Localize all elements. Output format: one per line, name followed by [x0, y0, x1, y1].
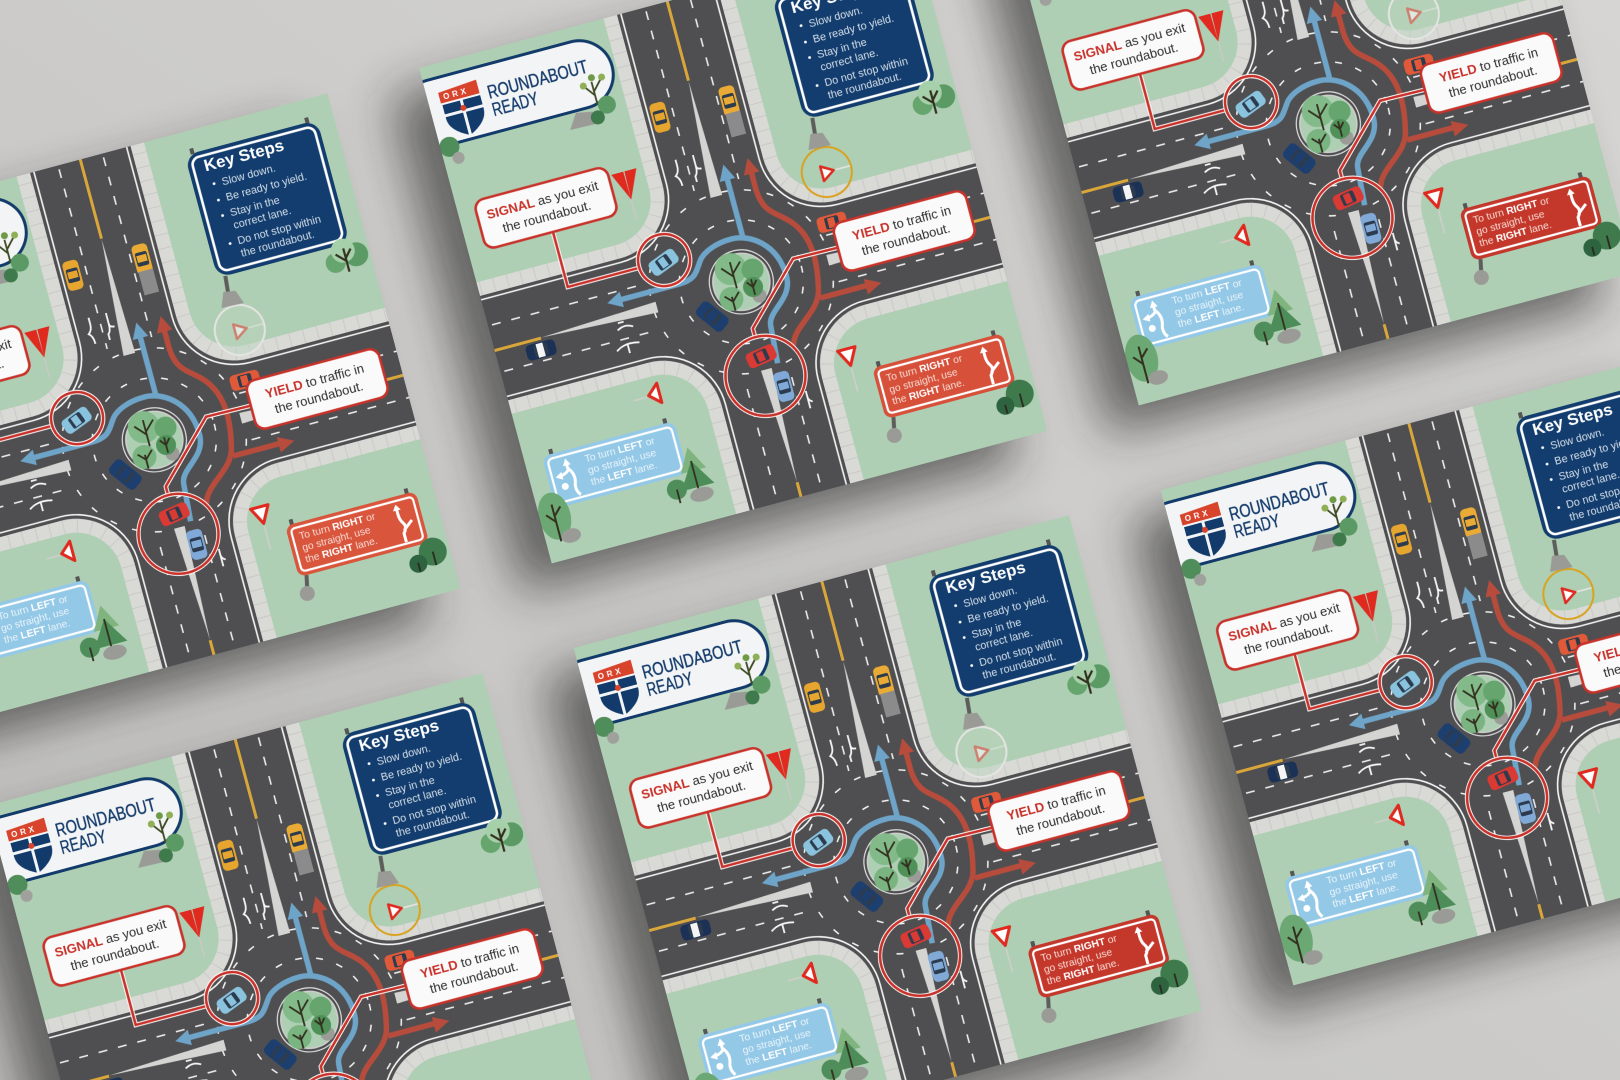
yield callout	[1419, 31, 1564, 115]
right lane sign: the RIGHT lane.	[1478, 220, 1553, 250]
vehicles	[1112, 37, 1555, 244]
key steps sign	[774, 0, 934, 150]
highlight ring around yield sign	[364, 879, 425, 941]
poster card: right lower	[1130, 351, 1620, 998]
key steps sign: Do not stop within	[823, 55, 909, 89]
key steps sign: Do not stop within	[236, 213, 322, 247]
red leader lines and highlight circles	[0, 390, 250, 576]
red leader lines and highlight circles	[708, 742, 1031, 1038]
key steps sign: Be ready to yield.	[380, 751, 463, 784]
yield signs	[1198, 7, 1446, 246]
right lane sign	[1022, 908, 1177, 1025]
trees and rocks	[1173, 492, 1464, 971]
left lane sign	[1127, 258, 1275, 351]
trees and rocks	[1018, 0, 1620, 391]
left lane sign: go straight, use	[1174, 290, 1245, 319]
road network with sidewalks	[0, 667, 621, 1080]
left lane sign: To turn LEFT or	[584, 436, 657, 465]
red leader lines and highlight circles	[551, 232, 838, 418]
left lane sign: To turn LEFT or	[1171, 278, 1244, 307]
yield callout	[1573, 611, 1620, 695]
left lane sign: To turn LEFT or	[1325, 858, 1398, 887]
yield signs	[611, 165, 858, 404]
title sign: ROUNDABOUT	[640, 637, 745, 683]
title sign: READY	[490, 89, 540, 120]
key steps sign	[335, 695, 513, 889]
right lane sign: go straight, use	[301, 525, 372, 554]
poster card: top centre	[389, 0, 1053, 576]
signal callout: SIGNAL as you exit	[1072, 20, 1187, 64]
right lane sign	[1454, 170, 1610, 287]
key steps sign: the roundabout.	[981, 651, 1057, 682]
highlight ring around yield sign	[1388, 0, 1440, 40]
left lane sign: the LEFT lane.	[1331, 882, 1400, 910]
signal callout: the roundabout.	[655, 777, 747, 816]
signal callout: the roundabout.	[1088, 39, 1180, 78]
yield signs	[143, 852, 476, 1080]
title sign: READY	[644, 669, 695, 700]
title sign: ORX	[1184, 508, 1212, 524]
left lane sign	[540, 416, 688, 509]
left lane sign: the LEFT lane.	[590, 460, 659, 488]
key steps sign: Stay in the	[816, 36, 868, 61]
yield callout: the roundabout.	[428, 958, 520, 996]
key steps sign: Do not stop within	[391, 793, 477, 827]
key steps sign: correct lane.	[232, 205, 293, 232]
yield callout: the roundabout.	[1015, 800, 1106, 838]
left lane sign: go straight, use	[741, 1028, 812, 1057]
trees and rocks	[440, 73, 1034, 543]
red leader lines and highlight circles	[1138, 74, 1424, 260]
yield callout: the roundabout.	[1447, 62, 1539, 100]
title sign: ORX	[442, 86, 470, 102]
key steps sign	[921, 537, 1100, 731]
key steps sign: the roundabout.	[240, 229, 316, 260]
key steps sign: the roundabout.	[827, 71, 903, 102]
trees and rocks	[0, 723, 527, 978]
right lane sign: To turn RIGHT or	[885, 353, 964, 384]
central island with trees	[270, 981, 349, 1059]
signal callout	[1215, 588, 1360, 672]
poster card: bottom centre	[543, 509, 1208, 1080]
direction arrows	[735, 713, 1049, 982]
yield callout: YIELD to traffic in	[419, 940, 521, 981]
title sign	[1135, 455, 1362, 577]
signal callout	[41, 904, 187, 988]
key steps sign: Be ready to yield.	[966, 593, 1050, 626]
direction arrows	[148, 871, 463, 1080]
signal callout: SIGNAL as you exit	[485, 178, 600, 222]
signal callout	[628, 746, 773, 830]
poster card: left upper	[0, 87, 466, 734]
yield callout: the roundabout.	[860, 220, 952, 258]
road network with sidewalks	[413, 0, 1053, 570]
yield callout	[245, 347, 390, 431]
highlight ring around yield sign	[1538, 563, 1599, 625]
yield signs	[1317, 536, 1620, 870]
vehicles	[526, 72, 968, 402]
right lane sign: go straight, use	[1043, 947, 1114, 976]
yield callout: YIELD to traffic in	[851, 202, 953, 243]
poster card: top right	[1030, 0, 1620, 406]
key steps sign: Key Steps	[357, 716, 441, 755]
key steps sign: Stay in the	[229, 194, 281, 219]
road network with sidewalks	[567, 509, 1208, 1080]
title sign: READY	[58, 827, 108, 858]
left lane sign	[695, 996, 843, 1080]
direction arrows	[1322, 555, 1620, 824]
red leader lines and highlight circles	[121, 900, 444, 1080]
title sign: ORX	[597, 666, 625, 682]
key steps sign: Key Steps	[943, 558, 1028, 597]
title sign: ORX	[10, 824, 38, 840]
vehicles	[627, 643, 1043, 1043]
direction arrows	[20, 316, 294, 522]
right lane sign: the RIGHT lane.	[891, 378, 966, 408]
key steps sign: Slow down.	[807, 4, 864, 30]
key steps sign: Key Steps	[1530, 400, 1615, 439]
left lane sign: the LEFT lane.	[1177, 302, 1246, 330]
right lane sign: the RIGHT lane.	[304, 536, 379, 566]
trees and rocks	[586, 565, 1196, 1080]
vehicles	[0, 221, 301, 621]
key steps sign: Key Steps	[202, 136, 286, 175]
central island with trees	[121, 406, 188, 473]
signal callout: the roundabout.	[1242, 619, 1334, 658]
title sign	[422, 38, 616, 145]
key steps sign: Slow down.	[1549, 426, 1606, 452]
highlight ring around yield sign	[214, 304, 266, 356]
left lane sign	[0, 576, 98, 658]
key steps sign: correct lane.	[819, 47, 880, 74]
trees and rocks	[0, 231, 447, 662]
key steps sign: correct lane.	[387, 785, 448, 812]
left lane sign: To turn LEFT or	[738, 1016, 811, 1045]
signal callout	[0, 324, 31, 382]
key steps sign: Stay in the	[970, 616, 1023, 641]
title sign	[0, 771, 189, 893]
title sign: ROUNDABOUT	[53, 795, 158, 841]
left lane sign: the LEFT lane.	[744, 1040, 813, 1068]
key steps sign: Stay in the	[1557, 458, 1610, 483]
key steps sign: correct lane.	[1561, 469, 1620, 496]
right lane sign: To turn RIGHT or	[298, 511, 377, 542]
left lane sign	[1282, 838, 1430, 931]
title sign: ROUNDABOUT	[485, 57, 590, 103]
signal callout: the roundabout.	[501, 197, 593, 236]
key steps sign: Be ready to yield.	[225, 171, 308, 204]
central island with trees	[708, 248, 774, 315]
poster card: bottom left	[0, 667, 621, 1080]
key steps sign: Slow down.	[962, 584, 1019, 610]
central island with trees	[857, 823, 935, 901]
signal callout	[1060, 8, 1206, 92]
vehicles	[1214, 485, 1620, 885]
central island with trees	[1295, 90, 1362, 157]
vehicles	[41, 801, 456, 1080]
highlight ring around yield sign	[800, 146, 854, 198]
left lane sign: go straight, use	[1328, 870, 1399, 899]
right lane sign: go straight, use	[888, 367, 959, 396]
right lane sign: To turn RIGHT or	[1472, 195, 1551, 226]
left lane sign: the LEFT lane.	[3, 618, 72, 646]
direction arrows	[607, 158, 882, 364]
road network with sidewalks	[1154, 351, 1620, 992]
signal callout: the roundabout.	[69, 935, 161, 974]
title sign: ROUNDABOUT	[1227, 479, 1332, 525]
yield callout: YIELD to traffic in	[1005, 782, 1107, 823]
title sign: READY	[1231, 511, 1282, 542]
key steps sign	[188, 117, 347, 308]
direction arrows	[1194, 0, 1468, 206]
yield callout	[400, 927, 545, 1011]
key steps sign: Slow down.	[220, 162, 277, 188]
key steps sign: Slow down.	[375, 742, 432, 768]
yield callout	[986, 769, 1131, 853]
left lane sign: go straight, use	[0, 606, 71, 635]
key steps sign: Be ready to yield.	[812, 13, 895, 46]
yield callout	[832, 189, 977, 273]
right lane sign	[874, 330, 1015, 443]
red leader lines and highlight circles	[1295, 584, 1618, 880]
signal callout: SIGNAL as you exit	[640, 758, 755, 802]
yield signs	[24, 323, 272, 562]
key steps sign: correct lane.	[974, 627, 1034, 654]
right lane sign: To turn RIGHT or	[1040, 933, 1119, 964]
key steps sign: the roundabout.	[395, 809, 471, 840]
right lane sign: go straight, use	[1475, 209, 1546, 238]
signal callout: SIGNAL as you exit	[53, 916, 168, 960]
yield callout: YIELD to traffic in	[1438, 44, 1540, 85]
signal callout: SIGNAL as you exit	[1227, 600, 1342, 644]
key steps sign: Stay in the	[384, 774, 436, 799]
key steps sign	[1508, 379, 1620, 573]
left lane sign: go straight, use	[587, 448, 658, 477]
yield callout: YIELD to traffic in	[264, 360, 366, 401]
yield signs	[730, 694, 1062, 1028]
road network with sidewalks	[0, 87, 466, 728]
right lane sign: the RIGHT lane.	[1046, 958, 1121, 988]
road network with sidewalks	[1000, 0, 1620, 412]
yield callout: the roundabout.	[273, 378, 365, 416]
right lane sign	[286, 488, 428, 601]
central island with trees	[1444, 665, 1522, 743]
key steps sign: Do not stop within	[978, 635, 1064, 669]
highlight ring around yield sign	[951, 721, 1012, 783]
signal callout	[473, 166, 619, 250]
title sign	[548, 613, 775, 735]
